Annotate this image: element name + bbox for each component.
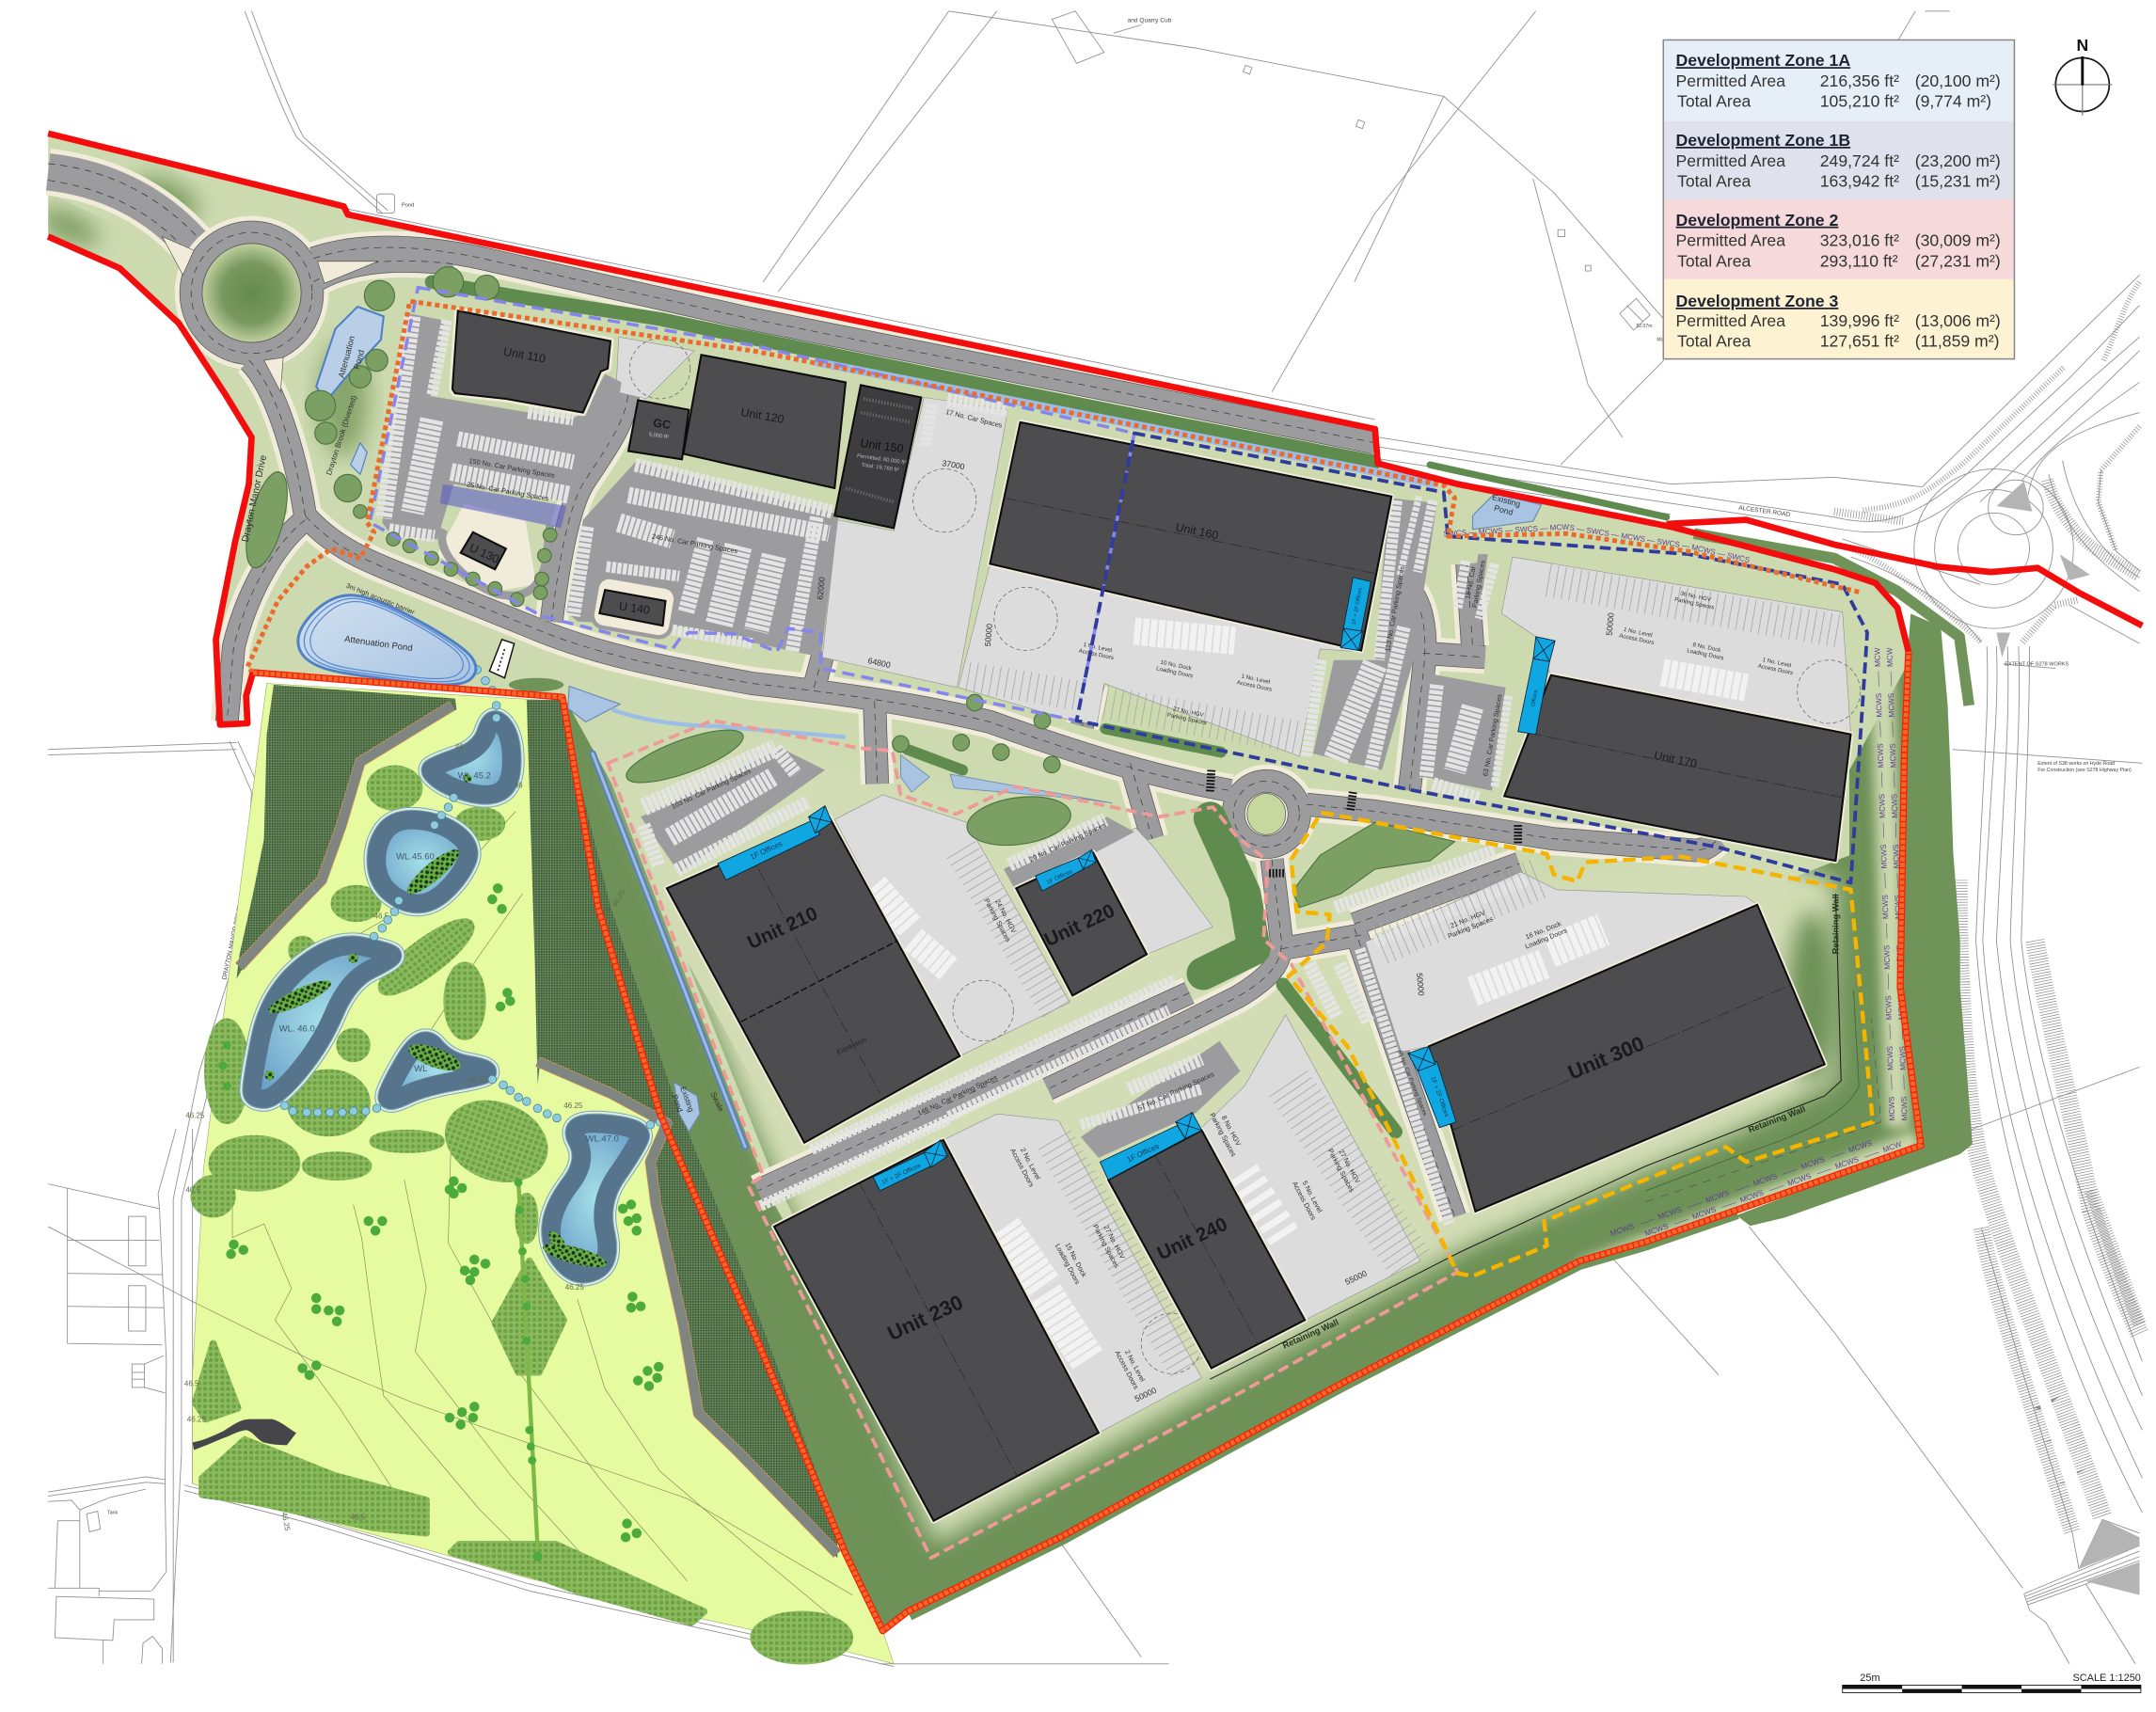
pond WL 45.60 bbox=[376, 820, 468, 903]
site annotations: 1 No. Level bbox=[1623, 626, 1653, 639]
car parks: grey surfacing bbox=[382, 313, 1506, 1158]
MCWS service easement labels: SWCS — MCWS — SWCS — MCWS — SWCS — MCWS — SWCS — MCWS — SWCS bbox=[1444, 524, 1750, 563]
turning circles bbox=[629, 339, 1861, 1373]
building: Unit 150: Total: 19,760 ft² bbox=[861, 463, 899, 473]
zone 1B boundary bbox=[1077, 434, 1867, 883]
pond level labels: 46.5 bbox=[185, 1185, 200, 1194]
legend: zone 1B: Development Zone 1B bbox=[1676, 131, 1850, 150]
site annotations: 63 No. Car Parking Spaces bbox=[1481, 693, 1504, 777]
site annotations: 21 No. HGV bbox=[1449, 909, 1486, 930]
site annotations: Loading Doors bbox=[1524, 926, 1569, 951]
hatched woodland east bbox=[527, 700, 837, 1558]
base map labels: 52.07m bbox=[1636, 324, 1653, 329]
legend: zone 2: (30,009 m²) bbox=[1915, 231, 2001, 250]
base map labels: Manor Cottages bbox=[1657, 338, 1691, 343]
legend: zone 1A: 216,356 ft² bbox=[1820, 71, 1899, 90]
green fringe along south boundary bbox=[911, 1215, 1738, 1617]
offices: Unit 240: 1F Offices bbox=[1126, 1142, 1160, 1164]
site annotations: Loading Doors bbox=[1687, 647, 1724, 661]
small landscaped ponds bbox=[900, 755, 929, 792]
legend: zone 3: (11,859 m²) bbox=[1915, 331, 1999, 350]
legend: zone 1A bbox=[1676, 51, 2001, 110]
pond level labels: 46.5 bbox=[351, 1513, 366, 1521]
site annotations: Pond bbox=[1493, 503, 1514, 517]
building: Unit 230 bbox=[774, 1140, 1099, 1521]
legend: zone 1A: 105,210 ft² bbox=[1820, 91, 1899, 110]
headwall hedge bbox=[509, 678, 563, 691]
offices: Unit 300: 1F + 2F Offices bbox=[1429, 1076, 1451, 1118]
legend: zone 1A: (9,774 m²) bbox=[1915, 91, 1991, 110]
site annotations: Parking Spaces bbox=[983, 897, 1013, 943]
pond level labels: 46.25 bbox=[185, 1111, 205, 1119]
site annotations: Parking Spaces bbox=[1673, 596, 1715, 611]
splitter islands bbox=[162, 236, 378, 392]
pond level labels bbox=[184, 743, 627, 1532]
legend: zone 1B: (15,231 m²) bbox=[1915, 171, 2001, 190]
offices: Unit 230: 1F + 2F Offices bbox=[880, 1163, 923, 1186]
retaining wall lines bbox=[1210, 894, 1841, 1379]
site annotations: 3m high acoustic barrier bbox=[345, 581, 417, 616]
building: U 130: U 130 bbox=[468, 541, 501, 566]
building: Unit 300: Unit 300 bbox=[1564, 1031, 1647, 1085]
scale bar bbox=[1843, 1672, 2141, 1693]
accessible parking hatch bbox=[440, 484, 566, 528]
pond level labels: 47.5 bbox=[596, 905, 611, 922]
site annotations: Attenuation Pond bbox=[343, 634, 413, 654]
base map labels: Tank bbox=[107, 1510, 118, 1515]
base map labels: ALCESTER ROAD bbox=[1738, 504, 1791, 518]
legend: zone 1A: Permitted Area bbox=[1676, 71, 1785, 90]
pond level labels: WL. 46.0 bbox=[279, 1023, 315, 1034]
base map labels: Pond bbox=[402, 202, 414, 208]
green path line bbox=[518, 1180, 538, 1548]
legend: zone 1B: 249,724 ft² bbox=[1820, 151, 1899, 170]
site annotations: Parking Spaces bbox=[1326, 1148, 1356, 1194]
offices: Unit 210: 1F Offices bbox=[749, 839, 784, 862]
roundabout island west bbox=[202, 244, 301, 342]
site annotations: 36 No. HGV bbox=[1680, 591, 1712, 604]
legend: zone 1A: Total Area bbox=[1677, 91, 1752, 110]
legend: zone 2: Permitted Area bbox=[1676, 231, 1785, 250]
site annotations: Access Doors bbox=[1113, 1349, 1141, 1391]
site annotations: Pond bbox=[671, 1094, 684, 1113]
attenuation pond north bbox=[316, 307, 384, 402]
legend: zone 1B: 163,942 ft² bbox=[1820, 171, 1899, 190]
base map labels: and Quarry Cub bbox=[1128, 17, 1172, 24]
site annotations: 1 No. Level bbox=[1762, 657, 1792, 669]
zone 1A boundary bbox=[370, 288, 1134, 721]
building: GC: 5,000 ft² bbox=[648, 432, 669, 440]
legend: zone 3: Permitted Area bbox=[1676, 311, 1785, 330]
existing pond north bbox=[1473, 494, 1542, 530]
tree belts bbox=[194, 769, 849, 1661]
base map labels: EXTENT OF S278 WORKS bbox=[2005, 662, 2069, 668]
MCWS service easement labels: MCWS —— MCWS —— MCWS —— MCWS —— MCWS —— MCWS bbox=[1644, 1141, 1900, 1236]
site annotations: 24 No. HGV bbox=[993, 897, 1019, 934]
site annotations bbox=[241, 335, 1840, 1403]
site annotations: 62000 bbox=[816, 577, 827, 600]
site annotations: Access Doors bbox=[1236, 679, 1273, 693]
legend: zone 1A: Development Zone 1A bbox=[1676, 51, 1850, 70]
hedge along the north road bbox=[432, 282, 1375, 462]
building: Unit 220 bbox=[1016, 849, 1147, 995]
site annotations: 8 No. HGV bbox=[1220, 1114, 1243, 1148]
green hedge between the two road boundaries bbox=[1694, 533, 1969, 705]
site annotations: 150 No. Car Parking Spaces bbox=[468, 456, 556, 480]
legend: zone 1B: Total Area bbox=[1677, 171, 1752, 190]
offices: Unit 170 bbox=[1518, 637, 1555, 735]
building: Unit 110: Unit 110 bbox=[502, 345, 547, 365]
site annotations: Pond bbox=[352, 349, 366, 371]
site annotations: Parking Spaces bbox=[1166, 712, 1208, 726]
site annotations: 50000 bbox=[1133, 1386, 1158, 1403]
pond level labels: 46 bbox=[455, 743, 464, 752]
building: Unit 120: Unit 120 bbox=[740, 405, 785, 426]
pond connecting chain of cascades bbox=[280, 666, 664, 1129]
hatched woodland west bbox=[236, 685, 456, 979]
north arrow: N bbox=[2076, 36, 2088, 55]
site annotations: 8 No. Dock bbox=[1692, 642, 1722, 654]
pond WL 46.0 bbox=[252, 945, 392, 1099]
roundabout hatched islands bbox=[1996, 482, 2139, 1595]
pond level labels: 46.25 bbox=[565, 1283, 584, 1292]
legend: zone 1B: (23,200 m²) bbox=[1915, 151, 2001, 170]
red highway boundary bbox=[1667, 520, 2142, 626]
base map labels: DRAYTON MANOR DRIVE bbox=[221, 905, 244, 980]
building: Unit 150: Unit 150 bbox=[860, 436, 904, 455]
site annotations: 27 No. HGV bbox=[1337, 1148, 1362, 1185]
site annotations: Drayton Manor Drive bbox=[241, 454, 269, 543]
contour lines bbox=[191, 811, 852, 1623]
car parking bays bbox=[384, 316, 1527, 1224]
site annotations: Retaining Wall bbox=[1831, 894, 1840, 954]
site annotations: Access Doors bbox=[1757, 663, 1794, 676]
reed beds bbox=[264, 774, 609, 1272]
scale bar: SCALE 1:1250 bbox=[2072, 1672, 2141, 1684]
building: Unit 220: Unit 220 bbox=[1041, 900, 1118, 951]
site annotations: 27 No. HGV bbox=[1172, 705, 1205, 719]
pond level labels: 46.5 bbox=[184, 1379, 199, 1387]
building: U 130 bbox=[461, 532, 506, 569]
site annotations: Loading Doors bbox=[1054, 1243, 1082, 1286]
building: U 140 bbox=[599, 590, 665, 626]
site annotations: 146 No. Car Parking Spaces bbox=[916, 1073, 999, 1118]
zone 2 boundary bbox=[608, 721, 1457, 1558]
MCWS service easement labels: MCWS —— MCWS —— MCWS —— MCWS —— MCWS —— MCWS bbox=[1610, 1140, 1872, 1236]
service strip dashed line and contours bbox=[1646, 991, 1881, 1202]
specimen tree groups bbox=[218, 883, 663, 1561]
pond level labels: 46.25 bbox=[280, 1512, 292, 1532]
site annotations: Parking Spaces bbox=[1447, 914, 1495, 941]
site annotations: 50000 bbox=[983, 623, 994, 647]
pond WL 46.5 bbox=[388, 1041, 486, 1100]
site annotations: 246 No. Car Parking Spaces bbox=[651, 531, 738, 555]
legend: zone 2: Total Area bbox=[1677, 251, 1752, 270]
U140 service apron bbox=[591, 575, 677, 639]
site annotations: 64800 bbox=[867, 656, 892, 670]
base map labels: For Construction (see S278 Highway Plan) bbox=[2037, 768, 2132, 773]
legend: zone 2 bbox=[1676, 211, 2001, 270]
legend: zone 3: 139,996 ft² bbox=[1820, 311, 1899, 330]
site annotations: 2 No. Level bbox=[1019, 1147, 1042, 1181]
building: Unit 210: Unit 210 bbox=[744, 902, 821, 954]
pond WL 45.2 bbox=[431, 721, 512, 795]
water features bbox=[298, 307, 1542, 1147]
yards bbox=[616, 337, 1850, 1433]
site annotations: 5 No. Level bbox=[1301, 1180, 1324, 1214]
site annotations: 17 No. Car Spaces bbox=[945, 407, 1004, 430]
legend: zone 1B bbox=[1676, 131, 2001, 190]
site annotations: 1 No. Level bbox=[1241, 674, 1271, 686]
site annotations: Parking Spaces bbox=[1470, 560, 1487, 609]
site annotations: 65 No. Car Parking Spaces bbox=[1396, 1050, 1428, 1117]
pond level labels: WL.45.60 bbox=[396, 852, 435, 863]
offices: Unit 210 bbox=[718, 806, 832, 880]
legend: zone 1A: (20,100 m²) bbox=[1915, 71, 2001, 90]
site annotations: Attenuation bbox=[337, 335, 357, 379]
dark track bbox=[193, 1419, 296, 1450]
attenuation pond large bbox=[298, 595, 476, 685]
U130 access ring bbox=[442, 525, 550, 595]
offices: Unit 240 bbox=[1100, 1113, 1202, 1180]
landscape field with ponds bbox=[184, 666, 894, 1664]
MCWS service easement labels: MCWS —— MCWS —— MCWS —— MCWS —— MCWS —— MCWS —— MCWS —— MCWS —— MCWS —— MCWS bbox=[1887, 647, 1908, 1120]
site annotations: 18 No. Car bbox=[1464, 565, 1478, 600]
pond level labels: 46.25 bbox=[563, 1102, 583, 1110]
pond level labels: 46.25 bbox=[610, 887, 627, 909]
legend: zone 2: 323,016 ft² bbox=[1820, 231, 1899, 250]
pond level labels: WL bbox=[414, 1064, 427, 1074]
pond WL 47.0 bbox=[551, 1124, 640, 1274]
MCWS service easement labels: MCWS —— MCWS —— MCWS —— MCWS —— MCWS —— MCWS —— MCWS —— MCWS —— MCWS —— MCWS bbox=[1874, 647, 1894, 1120]
existing pond by swale bbox=[674, 1082, 700, 1132]
HGV parking stalls bbox=[961, 580, 1840, 1371]
building: U 140: U 140 bbox=[618, 599, 651, 617]
offices: Unit 300 bbox=[1408, 1046, 1456, 1128]
red and orange stitched boundary bbox=[253, 652, 1921, 1631]
legend: zone 3: Total Area bbox=[1677, 331, 1752, 350]
pond level labels: WL.47.0 bbox=[586, 1133, 619, 1144]
pond level labels: 46 bbox=[515, 782, 523, 790]
legend: zone 3: (13,006 m²) bbox=[1915, 311, 2001, 330]
site annotations: Access Doors bbox=[1291, 1180, 1318, 1222]
building: Unit 120 bbox=[683, 355, 846, 488]
legend: zone 2: (27,231 m²) bbox=[1915, 251, 2001, 270]
site annotations: Loading Doors bbox=[1155, 665, 1194, 679]
building: Unit 240 bbox=[1100, 1113, 1305, 1368]
pond level labels: WL 45.2 bbox=[458, 770, 491, 781]
red site boundary north bbox=[48, 134, 1909, 652]
scale bar: 25m bbox=[1860, 1672, 1880, 1684]
building: Unit 150 bbox=[834, 385, 921, 528]
site annotations: 16 No. Dock bbox=[1524, 919, 1562, 942]
site annotations: Swale bbox=[709, 1091, 725, 1114]
site annotations: 57 No. Car Parking Spaces bbox=[1136, 1070, 1215, 1113]
site annotations: 55000 bbox=[1343, 1268, 1369, 1287]
site annotations: Retaining Wall bbox=[1747, 1104, 1807, 1134]
legend: zone 3: 127,651 ft² bbox=[1820, 331, 1899, 350]
culvert structure bbox=[489, 640, 515, 678]
pond level labels: 46.25 bbox=[468, 1075, 487, 1084]
site annotations: Existing bbox=[1491, 492, 1522, 509]
base map labels: Extent of S38 works on Hyde Road bbox=[2037, 761, 2115, 767]
offices: Unit 170: Offices bbox=[1530, 690, 1539, 707]
road network bbox=[191, 232, 1719, 1217]
site annotations: 103 No. Car Parking Spaces bbox=[670, 767, 753, 811]
MCWS service easement labels bbox=[1444, 524, 1908, 1236]
legend: zone 2: 293,110 ft² bbox=[1820, 251, 1898, 270]
orange development boundary bbox=[247, 301, 1862, 673]
embankment shading bbox=[33, 166, 1925, 1631]
legend: zone 2: Development Zone 2 bbox=[1676, 211, 1839, 230]
zone 3 boundary bbox=[1289, 813, 1873, 1276]
north arrow bbox=[2053, 36, 2112, 116]
site annotations: Access Doors bbox=[1078, 647, 1115, 661]
site annotations: Existing bbox=[678, 1086, 695, 1113]
swale bbox=[593, 753, 745, 1147]
building: Unit 170 bbox=[1504, 637, 1850, 861]
site annotations: Access Doors bbox=[1008, 1147, 1037, 1189]
building: Unit 300 bbox=[1408, 905, 1825, 1212]
building: Unit 160: Unit 160 bbox=[1174, 520, 1220, 542]
legend: development zone schedule bbox=[1663, 40, 2014, 359]
site annotations: 1 No. Level bbox=[1083, 642, 1113, 654]
legend: zone 1B: Permitted Area bbox=[1676, 151, 1785, 170]
approach road from the west bbox=[48, 164, 209, 270]
crossings bbox=[1210, 770, 1518, 873]
legend: zone 3: Development Zone 3 bbox=[1676, 292, 1839, 310]
site annotations: 50000 bbox=[1605, 612, 1616, 636]
site annotations: 15 No. Dock bbox=[1063, 1241, 1088, 1278]
site annotations: Retaining Wall bbox=[1281, 1318, 1340, 1351]
pond level labels: 46.5 bbox=[374, 912, 389, 921]
drainage along north bbox=[814, 362, 1437, 484]
pond level labels: 46.25 bbox=[187, 1416, 206, 1424]
building: Unit 230: Unit 230 bbox=[884, 1291, 966, 1345]
loading dock bays bbox=[875, 631, 1746, 1360]
building: Unit 170: Unit 170 bbox=[1653, 749, 1698, 770]
cream grounds bbox=[441, 507, 532, 587]
site annotations: 113 No. Car Parking Spaces bbox=[1383, 565, 1406, 652]
offices: Unit 230 bbox=[873, 1140, 947, 1191]
site annotations: 2 No. Level bbox=[1123, 1348, 1147, 1384]
site annotations: Parking Spaces bbox=[1208, 1112, 1238, 1158]
small pond bbox=[351, 443, 367, 474]
building: Unit 240: Unit 240 bbox=[1154, 1213, 1230, 1264]
offices: Unit 220: 1F Offices bbox=[1045, 868, 1074, 886]
site ground: north and south landscape bbox=[48, 134, 1921, 1631]
site annotations: 10 No. Dock bbox=[1160, 659, 1193, 673]
site annotations: 27 No. HGV bbox=[1102, 1224, 1127, 1260]
building: Unit 210: Expansion bbox=[835, 1035, 868, 1056]
legend: zone 3 bbox=[1676, 292, 2001, 350]
site annotations: 20 No. Car Parking Spaces bbox=[1028, 820, 1107, 864]
site annotations: Drayton Brook (Diverted) bbox=[325, 394, 358, 476]
site annotations: 37000 bbox=[942, 458, 965, 471]
building: Unit 110 bbox=[452, 310, 610, 413]
hedges and tree belts in the development bbox=[238, 267, 1455, 1132]
building: GC: GC bbox=[652, 416, 672, 432]
site annotations: 25 No. Car Parking Spaces bbox=[466, 480, 549, 503]
drainage ditch along site road bbox=[611, 709, 846, 737]
outer green strip east of the boundary bbox=[1738, 614, 1972, 1225]
building: Unit 150: Permitted: 60,000 ft² bbox=[857, 453, 907, 466]
site annotations: 50000 bbox=[1415, 973, 1426, 996]
red site boundary west road bbox=[48, 236, 253, 724]
offices: Unit 160 bbox=[1340, 578, 1371, 650]
site annotations: Parking Spaces bbox=[1091, 1223, 1121, 1270]
offices: Unit 160: 1F + 2F Offices bbox=[1352, 587, 1364, 626]
offices: Unit 220 bbox=[1036, 849, 1096, 891]
building: Unit 160 bbox=[990, 422, 1391, 650]
roundabout island east bbox=[1247, 793, 1286, 834]
site annotations: Access Doors bbox=[1619, 632, 1655, 646]
pond at field corner bbox=[568, 686, 620, 721]
building: GC bbox=[628, 400, 689, 459]
highway embankment hatching bbox=[1834, 282, 2139, 1531]
building: Unit 210 bbox=[667, 806, 959, 1143]
